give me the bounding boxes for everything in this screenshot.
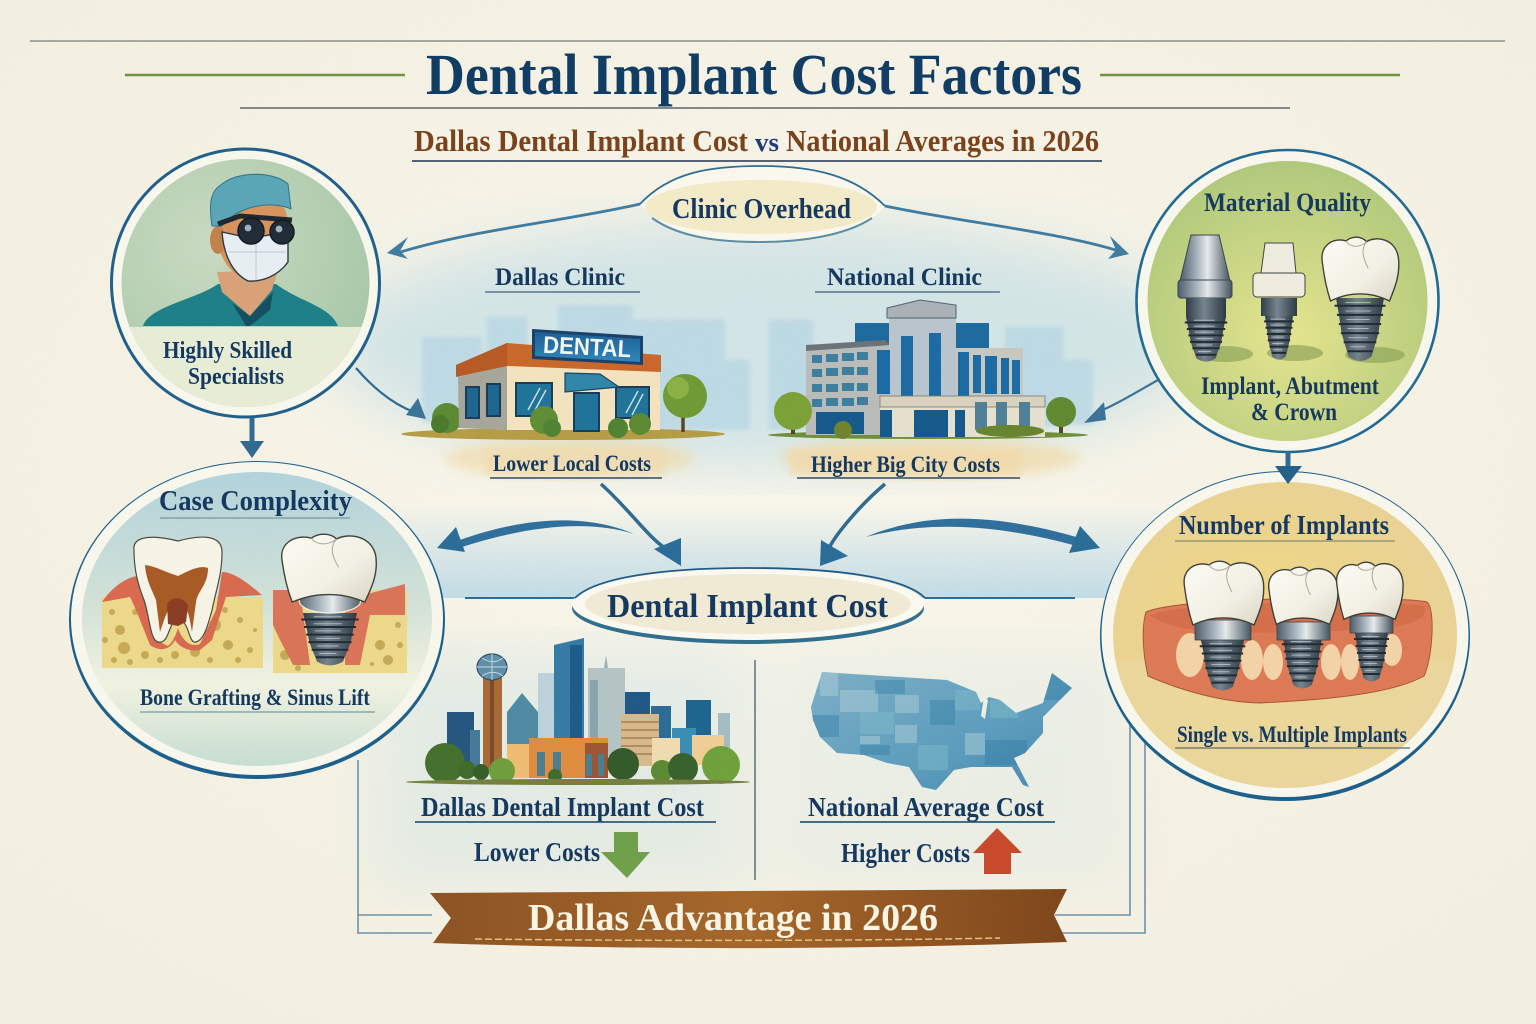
skyline wash: dallas bbox=[422, 305, 750, 430]
heading: dallas dental implant cost: Dallas Dental Implant Cost bbox=[421, 792, 704, 822]
label: Implant, Abutment bbox=[1201, 373, 1380, 400]
arrow: material to clinic bbox=[1084, 380, 1158, 423]
subtitle bbox=[412, 123, 1102, 161]
illustration: abutment bbox=[1253, 243, 1305, 360]
national panel bbox=[800, 665, 1080, 874]
subtitle: vs bbox=[755, 128, 779, 157]
arrow: specialists down bbox=[240, 414, 264, 458]
illustration: us map bbox=[811, 672, 1072, 790]
title: Dental Implant Cost Factors bbox=[426, 42, 1082, 107]
heading: Material Quality bbox=[1204, 188, 1371, 217]
label bbox=[1201, 373, 1380, 426]
illustration: dallas skyline bbox=[406, 638, 750, 785]
illustration: implant bbox=[1178, 235, 1405, 363]
illustration: surgeon bbox=[130, 174, 362, 407]
label: higher big city costs: Higher Big City Costs bbox=[811, 452, 1000, 477]
heading: dallas clinic: Dallas Clinic bbox=[495, 264, 625, 291]
icon: red up arrow bbox=[973, 828, 1022, 874]
illustration: crown bbox=[1322, 237, 1399, 361]
building: hospital bbox=[806, 300, 1045, 439]
connector frame lines bbox=[358, 598, 1145, 933]
header rules bbox=[30, 41, 1505, 108]
clinic overhead oval bbox=[640, 166, 885, 242]
label with up arrow bbox=[841, 828, 1022, 874]
banner: dallas advantage bbox=[430, 889, 1067, 948]
curved arrow: to case complexity bbox=[437, 520, 634, 552]
arrows into dental implant cost bbox=[601, 484, 885, 566]
illustration: gum and implants bbox=[1120, 561, 1450, 790]
arrow: material down bbox=[1275, 451, 1302, 484]
circle: material quality bbox=[1136, 150, 1438, 452]
dallas clinic panel bbox=[401, 264, 750, 478]
skyline wash: national bbox=[769, 320, 1093, 430]
dental implant cost oval bbox=[572, 568, 925, 644]
banner: dallas advantage: Dallas Advantage in 2026 bbox=[528, 897, 938, 939]
clinic overhead oval: Clinic Overhead bbox=[672, 194, 851, 225]
label with down arrow bbox=[474, 832, 650, 878]
building: dental office bbox=[456, 329, 661, 438]
building: dental office: DENTAL bbox=[542, 332, 632, 363]
label: Highly Skilled bbox=[163, 338, 293, 364]
ground: national bbox=[768, 431, 1088, 478]
label: Single vs. Multiple Implants bbox=[1177, 722, 1407, 747]
label with down arrow: Lower Costs bbox=[474, 837, 600, 867]
ground: dallas bbox=[401, 428, 725, 478]
heading: national clinic: National Clinic bbox=[827, 264, 982, 291]
label: lower local costs: Lower Local Costs bbox=[493, 451, 651, 476]
tree: dallas right bbox=[431, 374, 707, 433]
subtitle: National Averages in 2026 bbox=[786, 123, 1099, 158]
heading: national average cost: National Average Cost bbox=[808, 792, 1044, 822]
arrow: specialists to clinic bbox=[356, 368, 426, 419]
illustration: implant in bone bbox=[273, 534, 407, 673]
label with up arrow: Higher Costs bbox=[841, 838, 970, 868]
label: Specialists bbox=[188, 364, 284, 390]
circle: highly skilled specialists bbox=[110, 149, 381, 420]
circle: case complexity bbox=[69, 461, 445, 779]
label: & Crown bbox=[1251, 399, 1337, 426]
trees: national bbox=[774, 392, 1076, 434]
dental implant cost oval: Dental Implant Cost bbox=[607, 588, 889, 625]
label: Bone Grafting & Sinus Lift bbox=[140, 685, 370, 711]
subtitle: Dallas Dental Implant Cost bbox=[414, 123, 749, 158]
arrows from clinic overhead bbox=[387, 204, 1129, 259]
circle: number of implants bbox=[1100, 471, 1470, 801]
icon: green down arrow bbox=[601, 832, 650, 878]
heading: Case Complexity bbox=[159, 485, 352, 517]
curved arrow: to number of implants bbox=[866, 519, 1100, 553]
illustration: natural tooth bbox=[102, 537, 263, 668]
heading: Number of Implants bbox=[1179, 510, 1389, 540]
national clinic panel bbox=[768, 264, 1093, 478]
label bbox=[163, 338, 293, 390]
dallas panel bbox=[406, 638, 750, 878]
